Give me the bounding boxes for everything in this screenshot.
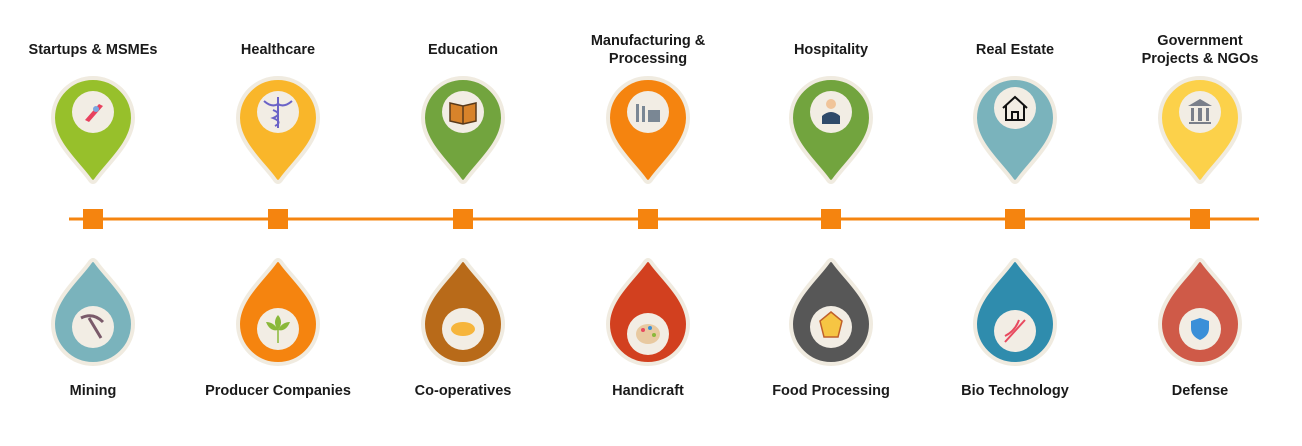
pin: Government Projects & NGOs	[1142, 33, 1258, 182]
pin: Government Projects & NGOs: Government	[1157, 33, 1243, 49]
pin: Handicraft: Handicraft	[612, 383, 684, 399]
pin: Bio Technology	[961, 260, 1069, 399]
pin: Real Estate	[975, 42, 1055, 182]
pin: Startups & MSMEs	[29, 42, 157, 182]
pin: Producer Companies	[205, 260, 351, 399]
pin: Manufacturing & Processing: Manufacturing &	[591, 33, 706, 49]
pin: Co-operatives: Co-operatives	[415, 383, 511, 399]
pin: Education	[423, 42, 503, 182]
pin: Defense	[1160, 260, 1240, 399]
pin: Bio Technology: Bio Technology	[961, 383, 1069, 399]
pin: Manufacturing & Processing: Processing	[609, 51, 687, 67]
timeline	[69, 209, 1259, 229]
pin: Real Estate: Real Estate	[976, 42, 1054, 58]
pin: Hospitality: Hospitality	[794, 42, 868, 58]
pin: Mining	[53, 260, 133, 399]
pin: Education: Education	[428, 42, 498, 58]
pin: Hospitality	[791, 42, 871, 182]
pin: Food Processing	[772, 260, 890, 399]
pin: Producer Companies: Producer Companies	[205, 383, 351, 399]
pin: Healthcare: Healthcare	[241, 42, 315, 58]
pin: Healthcare	[238, 42, 318, 182]
pin: Manufacturing & Processing	[591, 33, 706, 182]
pin: Food Processing: Food Processing	[772, 383, 890, 399]
pin: Co-operatives	[415, 260, 511, 399]
pin: Defense: Defense	[1172, 383, 1228, 399]
pin: Handicraft	[608, 260, 688, 399]
pin: Government Projects & NGOs: Projects & NGOs	[1142, 51, 1258, 67]
pin: Startups & MSMEs: Startups & MSMEs	[29, 42, 157, 58]
pin: Mining: Mining	[70, 383, 116, 399]
